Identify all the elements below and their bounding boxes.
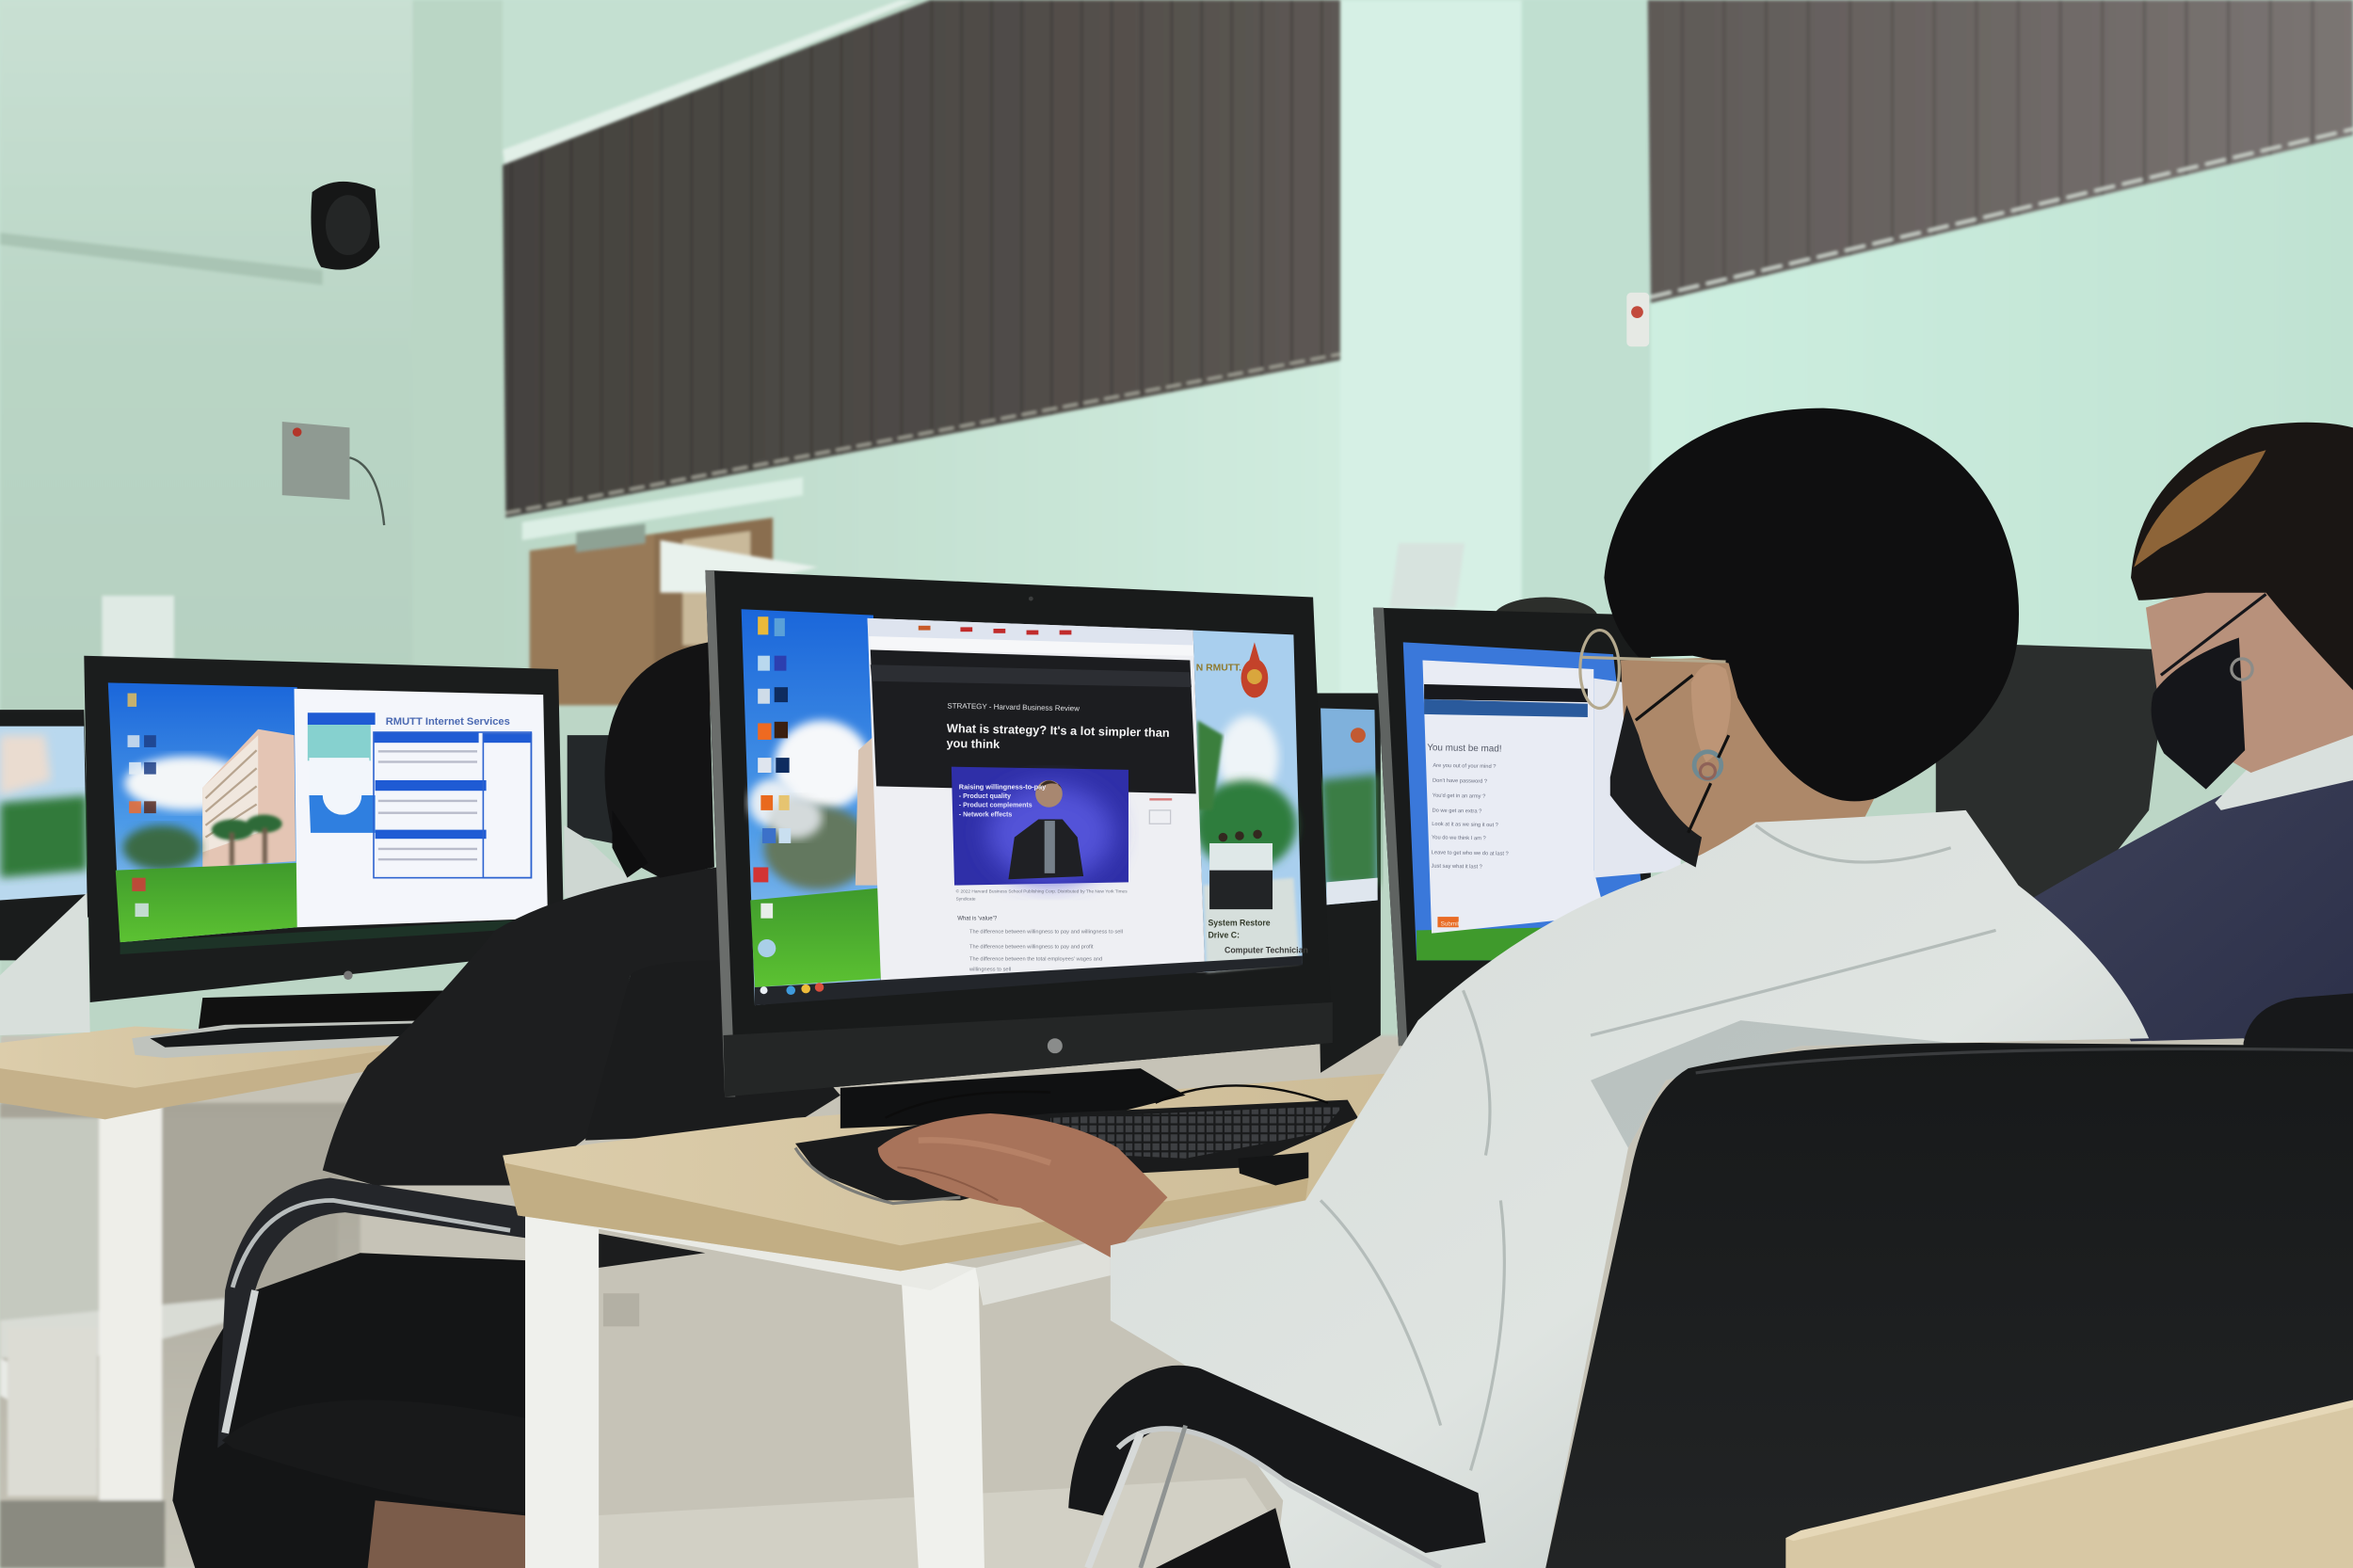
main student: white shirt seen from behind [1111, 408, 2149, 1568]
far-left monitor [0, 710, 90, 960]
quiz text: Just say what it last ? [1431, 864, 1482, 871]
hand on mouse [878, 1113, 1167, 1257]
caption and question: The difference between the total employees' wages and [969, 956, 1102, 962]
wallpaper [108, 682, 297, 942]
bezel [705, 570, 1333, 1096]
caption and question: © 2022 Harvard Business School Publishing Corp. Distributed by The New York Times [956, 888, 1128, 895]
quiz text: You'd get in an army ? [1433, 793, 1485, 800]
person left: dark hair, black jacket, seated [0, 642, 720, 1568]
stand [198, 990, 450, 1032]
right student [2029, 423, 2353, 1050]
palm trees [212, 815, 282, 866]
ear [1691, 664, 1731, 762]
wall alarm [1626, 293, 1649, 346]
top [503, 1073, 1403, 1271]
desktop icons [128, 694, 156, 917]
shirt folds [1321, 825, 1996, 1470]
dark article header [871, 649, 1196, 793]
pants of main student [1156, 1508, 1290, 1568]
face-mask [1610, 705, 1702, 867]
centre keyboard and mouse [795, 1085, 1358, 1204]
bezel [84, 656, 564, 1002]
legs [172, 1253, 525, 1568]
left desk [0, 1026, 435, 1568]
grass [750, 888, 881, 987]
glasses [1580, 631, 1726, 708]
caption and question: willingness to sell [968, 967, 1011, 972]
wall control box [282, 422, 384, 525]
quiz text: Don't have password ? [1433, 778, 1487, 785]
wallpaper [1403, 642, 1651, 960]
left monitor [84, 656, 564, 1032]
wallpaper [742, 609, 881, 1005]
left keyboard [132, 1020, 435, 1058]
hair [1604, 408, 2019, 801]
submit button [1437, 917, 1460, 928]
video thumbnail: - Product complements [959, 803, 1032, 809]
desktop icons [753, 616, 791, 957]
cabinet under the desk [598, 1245, 1351, 1568]
hair and mask [605, 642, 714, 878]
hair [2131, 423, 2353, 690]
quiz text: Look at it as we sing it out ? [1432, 822, 1498, 828]
desk frame and cabinet [0, 1103, 360, 1568]
grass [116, 863, 297, 942]
quiz text [1425, 743, 1511, 871]
white shirt of neighbouring student [0, 893, 90, 1035]
desk edge [0, 1048, 405, 1119]
wallpaper caption [1196, 664, 1308, 954]
caption and question: What is 'value'? [957, 916, 998, 921]
submit button: Submit [1441, 921, 1460, 928]
quiz text: You do we think I am ? [1432, 835, 1486, 841]
site title: RMUTT Internet Services [386, 716, 510, 728]
quiz text: Leave to get who we do at last ? [1432, 850, 1509, 857]
university crest [1241, 642, 1268, 697]
legs [525, 1208, 599, 1568]
neck and face [1621, 657, 1876, 878]
caption and question: The difference between willingness to pay and willingness to sell [969, 930, 1123, 936]
chrome arm frame [1118, 1429, 1441, 1568]
dark monitor behind the students [1936, 642, 2169, 901]
taskbar [120, 919, 548, 954]
video thumbnail [952, 767, 1128, 886]
earring [1694, 752, 1721, 778]
shirt shadow [1591, 1020, 1951, 1148]
jacket [323, 867, 720, 1185]
paper sheets on monitors [102, 540, 1465, 659]
right monitor with quiz [1373, 608, 1681, 1046]
desk top [0, 1026, 435, 1088]
stand [840, 1068, 1186, 1128]
caption and question: Syndicate [956, 897, 976, 903]
browser white page [868, 618, 1205, 982]
shirt body [1111, 810, 2149, 1568]
backrest [1545, 1043, 2353, 1568]
face [2146, 570, 2353, 773]
taskbar [755, 956, 1303, 1005]
sweater [2029, 780, 2353, 1050]
article text: you think [946, 736, 1000, 751]
article text: What is strategy? It's a lot simpler than [947, 721, 1170, 740]
foreground desk corner [1785, 1400, 2353, 1568]
quiz text: Are you out of your mind ? [1433, 763, 1496, 770]
browser window [294, 689, 548, 927]
browser tabs [868, 618, 1193, 648]
wallpaper caption: Drive C: [1208, 930, 1240, 939]
quiz text: You must be mad! [1427, 743, 1502, 755]
bezel [1373, 608, 1651, 1046]
centre monitor [705, 570, 1333, 1128]
door at the back of the room [530, 518, 773, 705]
wall speaker [311, 182, 379, 270]
left chair [217, 960, 840, 1512]
mask [2152, 638, 2245, 790]
browser window [1422, 660, 1606, 934]
video thumbnail: - Product quality [959, 793, 1011, 800]
wallpaper caption: Computer Technician [1225, 945, 1308, 954]
right chair back [2244, 993, 2353, 1058]
building [202, 729, 296, 867]
caption and question: The difference between willingness to pay and profit [969, 945, 1094, 951]
right-centre small monitor behind [1313, 694, 1381, 1073]
window blind: centre [503, 0, 1340, 518]
quiz text: Do we get an extra ? [1432, 808, 1481, 815]
wallpaper caption: N RMUTT. [1196, 664, 1241, 674]
right wallpaper [1193, 631, 1303, 972]
dark monitor back behind left student [568, 735, 613, 843]
centre desk [503, 1073, 1403, 1568]
person far back: dark hair behind right monitor [1493, 598, 1598, 639]
collar [2215, 728, 2353, 810]
wallpaper caption: System Restore [1208, 919, 1271, 928]
article text: STRATEGY - Harvard Business Review [947, 701, 1080, 712]
article text [946, 701, 1170, 755]
video thumbnail: - Network effects [959, 811, 1012, 818]
window blind: right [1648, 0, 2353, 303]
trees [764, 806, 872, 889]
video thumbnail: Raising willingness-to-pay [959, 783, 1047, 792]
armrest [1068, 1366, 1485, 1553]
caption and question [956, 888, 1128, 972]
foreground chair [1068, 1043, 2353, 1568]
side rating widget [1149, 798, 1172, 824]
